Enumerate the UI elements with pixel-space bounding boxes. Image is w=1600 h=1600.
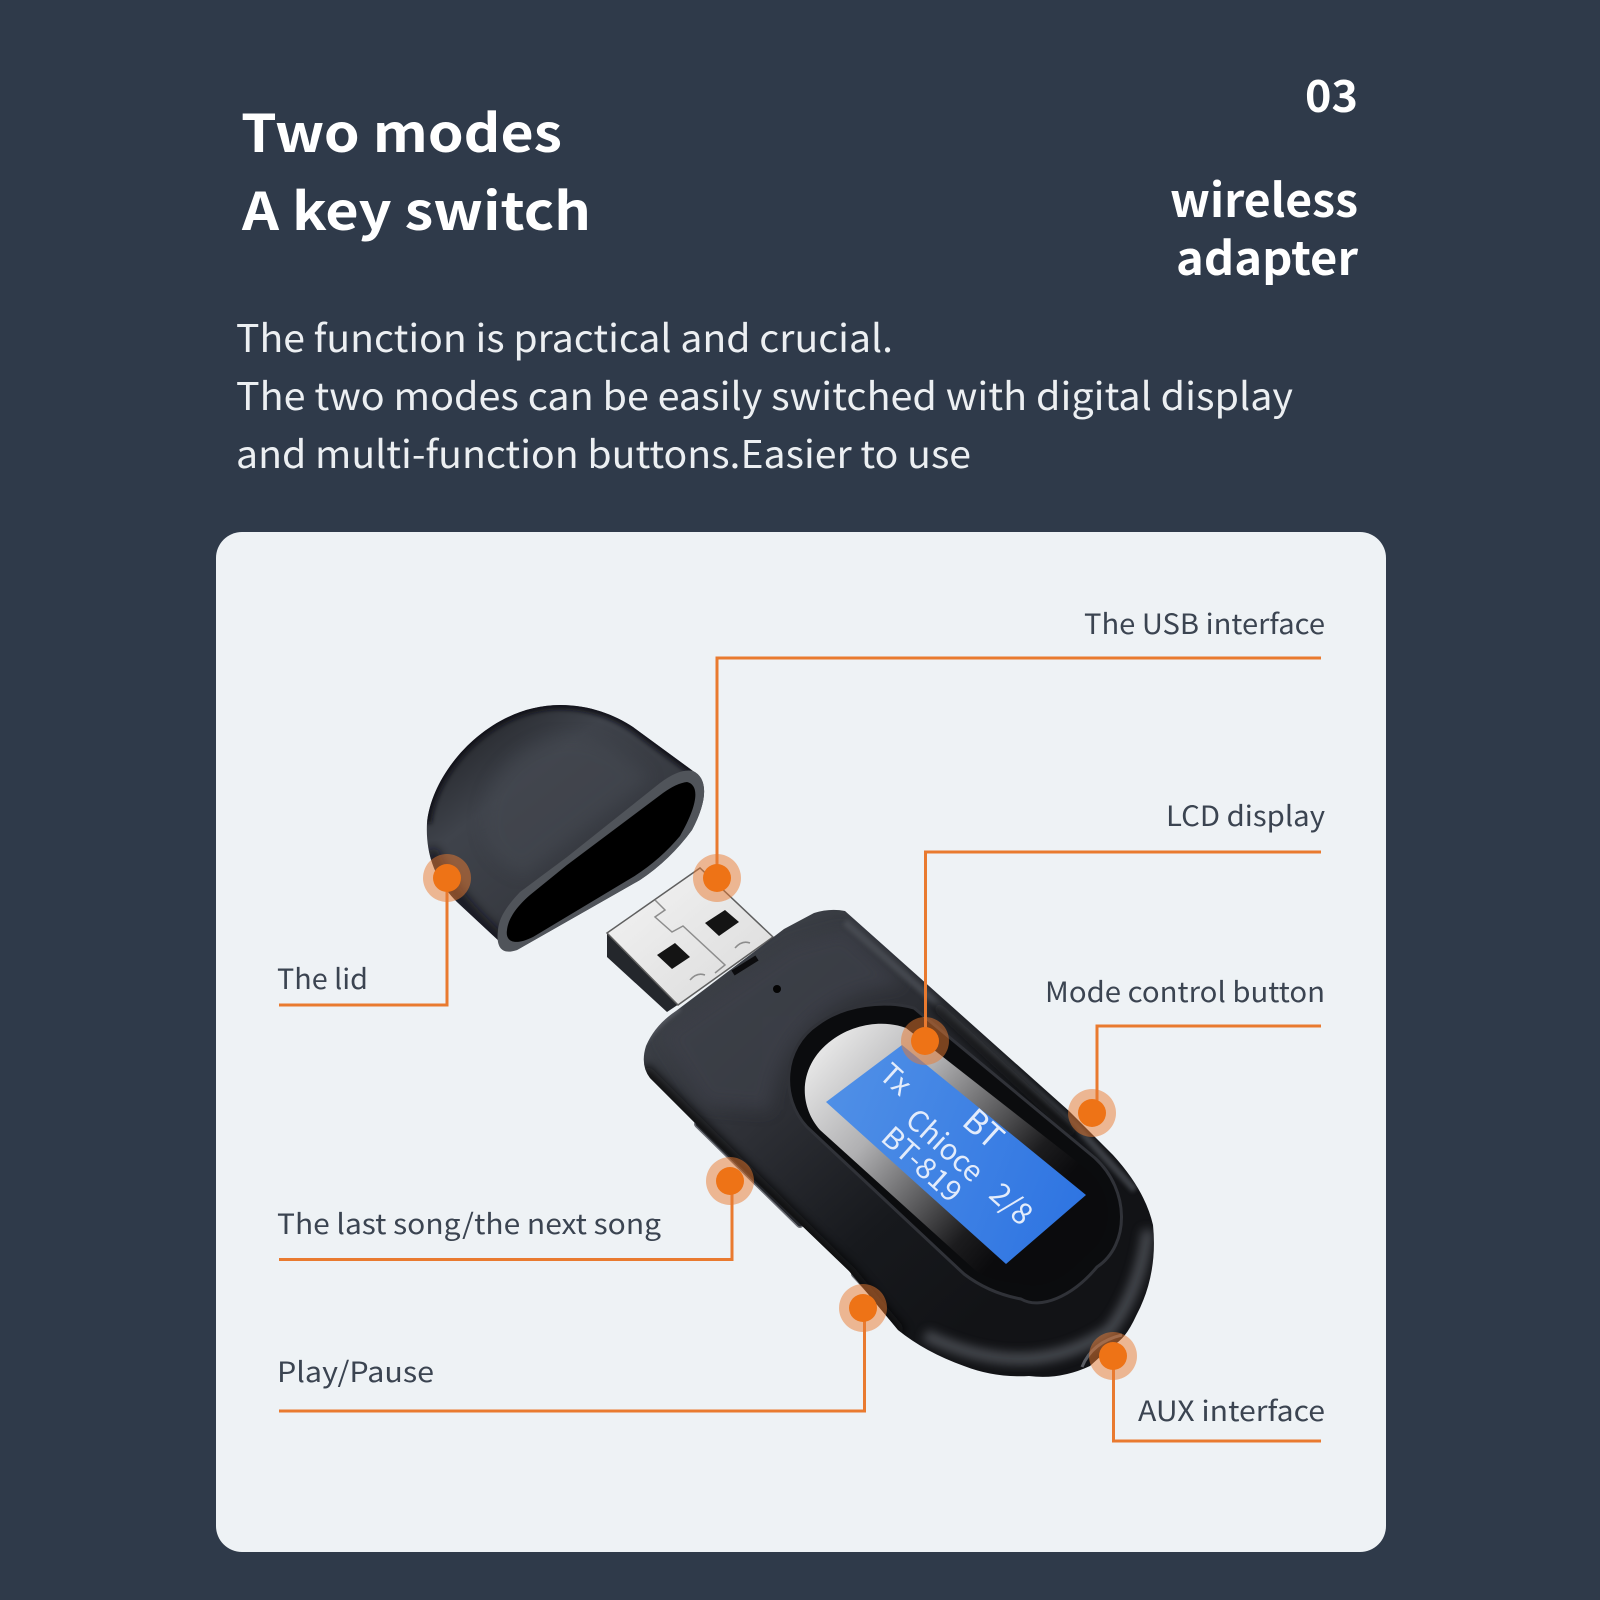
callout: The USB interface xyxy=(693,603,1325,902)
callout: AUX interface: AUX interface xyxy=(1138,1390,1325,1430)
title xyxy=(241,92,591,245)
side buttons xyxy=(698,1124,898,1320)
description text: The two modes can be easily switched with digital display xyxy=(236,366,1293,421)
callout: The last song/the next song xyxy=(277,1157,754,1260)
callout: Mode control button xyxy=(1045,971,1325,1137)
callout: The lid xyxy=(277,854,471,1005)
callout: Play/Pause xyxy=(277,1284,887,1411)
title: A key switch xyxy=(241,170,591,245)
display text: Tx xyxy=(872,1052,922,1104)
icon: LCD screen xyxy=(789,1004,1122,1303)
display text: BT xyxy=(954,1096,1016,1158)
mic hole xyxy=(773,985,781,993)
description text xyxy=(236,308,1293,479)
description text: and multi-function buttons.Easier to use xyxy=(236,424,971,479)
callout: LCD display: LCD display xyxy=(1166,795,1325,835)
callout: AUX interface xyxy=(1089,1332,1325,1441)
USB slot xyxy=(733,958,757,973)
aux port xyxy=(1082,1335,1122,1367)
display text xyxy=(872,1052,1044,1233)
callout: The lid: The lid xyxy=(277,958,368,998)
icon: lid xyxy=(427,705,704,952)
infographic canvas xyxy=(216,80,1386,1552)
title: Two modes xyxy=(241,92,562,167)
callout: LCD display xyxy=(901,795,1325,1065)
product name: wireless xyxy=(1170,165,1358,231)
product name: adapter xyxy=(1176,223,1359,289)
display text: 2/8 xyxy=(982,1171,1044,1233)
body shading xyxy=(640,922,1148,1359)
display text: BT-819 xyxy=(873,1115,973,1211)
callout: Mode control button: Mode control button xyxy=(1045,971,1325,1011)
section number: 03 xyxy=(1305,61,1358,125)
callout: Play/Pause: Play/Pause xyxy=(277,1351,434,1391)
callout: The last song/the next song: The last song/the next song xyxy=(277,1203,661,1243)
icon: adapter body xyxy=(640,910,1154,1377)
callout: The USB interface: The USB interface xyxy=(1084,603,1325,643)
description text: The function is practical and crucial. xyxy=(236,308,893,363)
product name xyxy=(1170,165,1359,289)
display text: Chioce xyxy=(898,1098,994,1190)
panel: product card xyxy=(216,532,1386,1552)
blue display xyxy=(826,1045,1086,1264)
icon: USB plug xyxy=(607,868,773,1012)
